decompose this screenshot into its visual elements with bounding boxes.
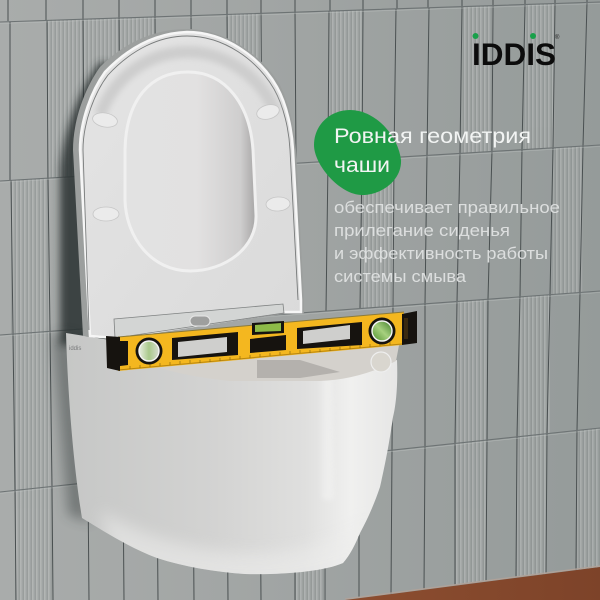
body text: и эффективность работы bbox=[334, 245, 548, 263]
toilet seat lid bbox=[73, 29, 304, 338]
seat raised ridge bbox=[100, 52, 275, 115]
logo green dot one bbox=[472, 33, 478, 39]
level left window bbox=[172, 332, 238, 360]
level top edge bbox=[118, 312, 404, 337]
body text bbox=[334, 199, 560, 286]
logo registered mark: ® bbox=[555, 34, 560, 41]
heading: Ровная геометрия bbox=[334, 125, 531, 148]
body text: системы смыва bbox=[334, 268, 467, 286]
green accent blob bbox=[314, 110, 401, 195]
floor bbox=[345, 566, 600, 600]
level left vial bbox=[136, 338, 162, 364]
body text: прилегание сиденья bbox=[334, 222, 510, 240]
level right end cap bbox=[402, 311, 417, 345]
bowl logo mark: iddis bbox=[69, 346, 81, 352]
seat hinge strip bbox=[114, 304, 284, 338]
level top vial bbox=[252, 321, 284, 335]
level right window bbox=[297, 322, 362, 349]
level body bbox=[118, 312, 404, 371]
heading: чаши bbox=[334, 154, 390, 177]
seat rubber foot bottom right bbox=[266, 196, 290, 212]
bowl inner shadow bbox=[257, 360, 340, 378]
brand logo: IDDIS bbox=[472, 36, 556, 72]
body text: обеспечивает правильное bbox=[334, 199, 560, 217]
bowl inner opening bbox=[153, 340, 400, 381]
wall shadow behind toilet bbox=[52, 62, 130, 522]
seat edge line bbox=[83, 36, 298, 330]
logo green dot two bbox=[530, 33, 536, 39]
seat rubber foot bottom left bbox=[93, 207, 119, 221]
seat rubber foot top right bbox=[255, 102, 281, 122]
seat hinge slot bbox=[190, 316, 210, 326]
level centre label bbox=[250, 335, 286, 353]
level right vial bbox=[368, 318, 396, 344]
seat face bbox=[80, 32, 301, 338]
seat rubber foot top left bbox=[91, 111, 119, 129]
heading bbox=[334, 125, 531, 177]
bowl rim reflection bbox=[371, 352, 391, 372]
level left end cap bbox=[106, 336, 128, 371]
toilet bowl bbox=[66, 333, 400, 590]
spirit level bbox=[106, 311, 417, 371]
seat outer side bbox=[73, 29, 304, 338]
seat hole bbox=[125, 72, 256, 271]
level ruler ticks bbox=[118, 344, 402, 370]
bowl shading bbox=[103, 516, 360, 574]
